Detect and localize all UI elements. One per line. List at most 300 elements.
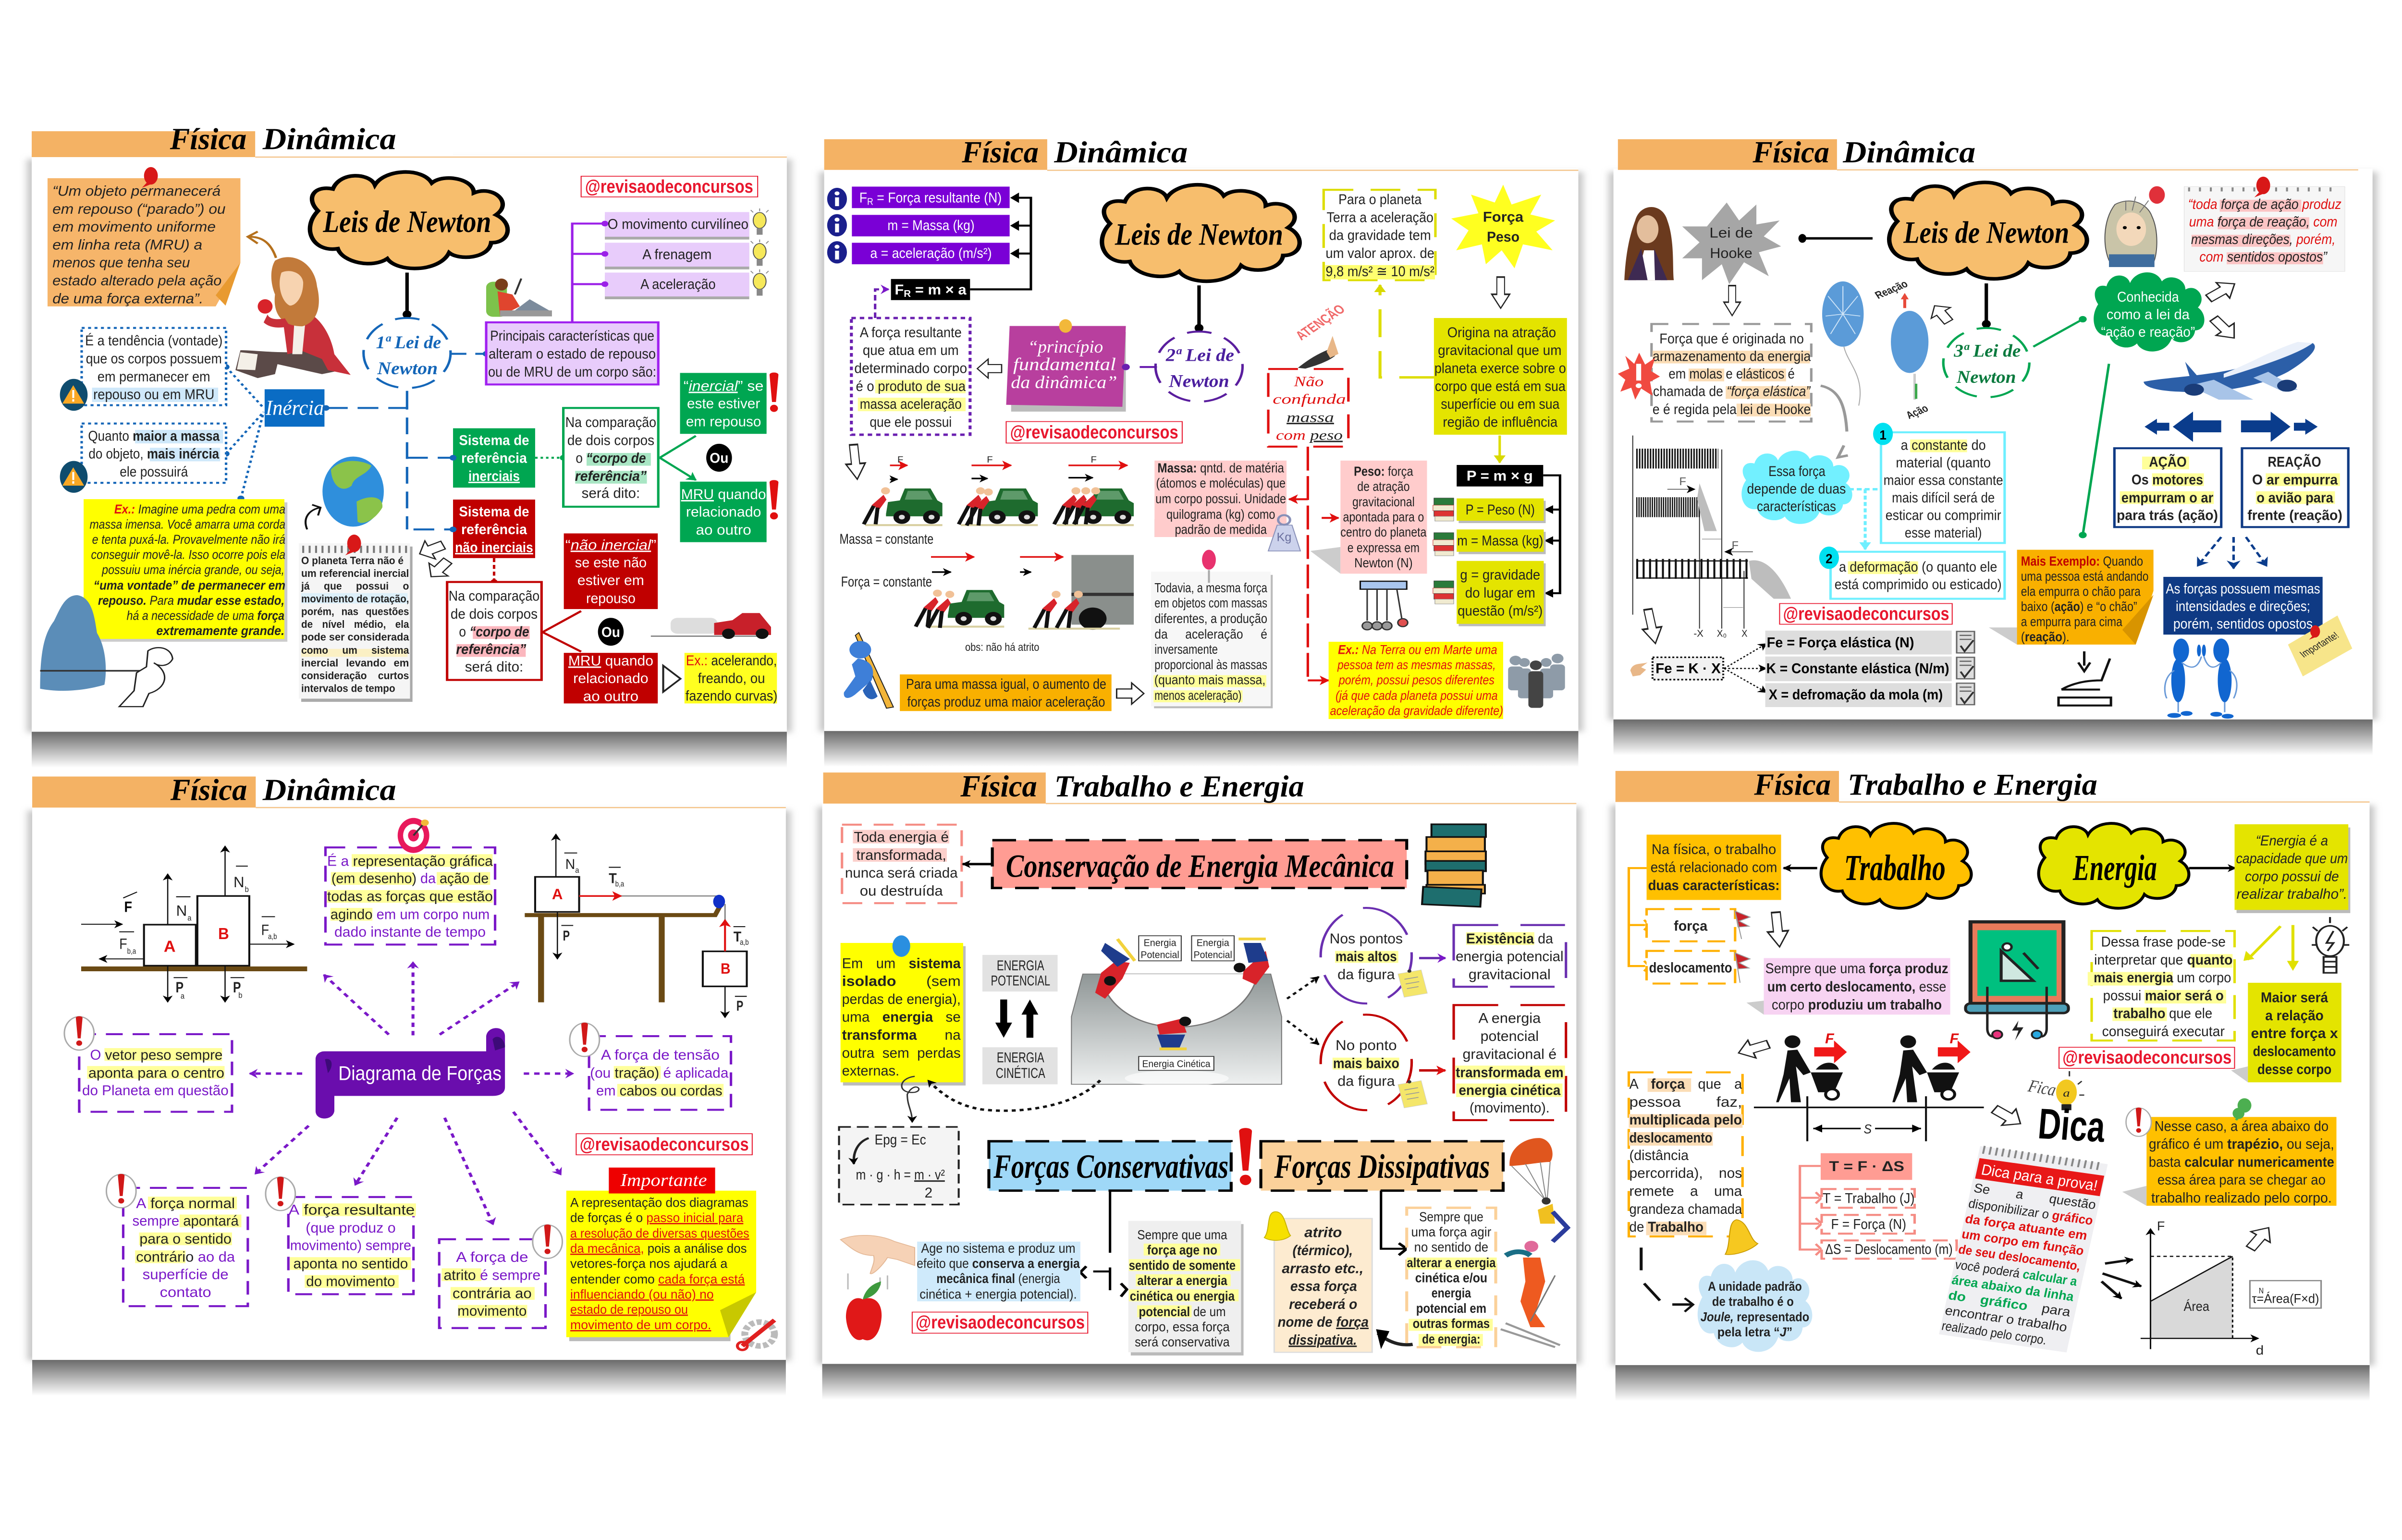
quote note	[48, 167, 240, 306]
formula: P = m x g	[1457, 465, 1543, 487]
box: força: força	[1674, 918, 1707, 934]
circle: 2ª Lei de Newton	[1155, 331, 1242, 402]
text: força elástica: em molas e elásticos é	[1668, 366, 1795, 382]
text: na física: está relacionado com	[1651, 860, 1777, 876]
note: mais exemplo: baixo (ação) e “o chão”	[2021, 599, 2137, 614]
illustration: cars mass constant: F	[897, 455, 903, 464]
label: Importante: Importante	[620, 1170, 707, 1190]
block: inercial em repouso: “inercial” se	[684, 379, 764, 394]
note: planeta Terra: porém, nas questões	[301, 606, 409, 618]
note: todavia: proporcional às massas	[1154, 657, 1267, 672]
text: sempre que dissipativa: alterar a energia	[1407, 1255, 1496, 1270]
banner: Diagrama de Forças	[316, 1028, 505, 1118]
note: importante	[566, 1191, 756, 1341]
text: massa: Quanto maior a massa	[88, 428, 220, 444]
text: não confunda: confunda	[1273, 391, 1346, 407]
icon: lightning bulb	[2312, 917, 2349, 973]
cloud: duas características: características	[1757, 499, 1836, 514]
quote note: menos que tenha seu	[52, 255, 190, 271]
legend: P m g: g = gravidade	[1460, 567, 1540, 583]
handle: @revisaodeconcursos	[580, 1134, 749, 1155]
formula: T = F . ΔS	[1821, 1153, 1912, 1180]
diagram: springs: F	[1732, 539, 1739, 551]
example: Terra e Marte: Ex.: Na Terra ou em Marte uma	[1338, 643, 1497, 657]
text: não confunda	[1268, 369, 1348, 447]
note: sistema isolado: perdas de energia),	[842, 991, 961, 1007]
text: dessa frase: mais energia um corpo	[2094, 970, 2231, 986]
circle: pontos altos	[1321, 908, 1427, 1003]
text: atrito: contrária ao	[453, 1286, 532, 1302]
text: a força: remete a uma	[1630, 1184, 1742, 1199]
box: REAÇÃO: frente (reação)	[2247, 508, 2342, 523]
icon: outline triangle	[663, 666, 681, 692]
text: forças opostas	[2163, 577, 2323, 635]
legend: FR m a	[827, 186, 1010, 264]
handle: @revisaodeconcursos	[2062, 1048, 2231, 1068]
circle: 3ª Lei de Newton	[1943, 328, 2029, 397]
arrows: outline	[2202, 276, 2243, 344]
burst: Lei de Hooke	[1682, 203, 1781, 284]
illustration: airplane	[2144, 342, 2315, 400]
text: peso definição: Newton (N)	[1354, 555, 1413, 570]
block: não inerciais: Sistema de	[459, 504, 529, 520]
formula: FR = m x a	[891, 279, 970, 300]
header: Física Trabalho e Energia: Trabalho e Energia	[1054, 770, 1304, 803]
illustration: balloons: Reação	[1873, 278, 1910, 301]
note: dica para a prova: Dica para a prova!	[1980, 1161, 2099, 1194]
text: toda energia: transformada,	[857, 847, 946, 863]
energy labels: ENERGIA	[997, 1050, 1044, 1066]
text: força normal: para o sentido	[139, 1231, 232, 1247]
text: definição energia: capacidade que um	[2236, 851, 2348, 867]
icon: person reclining	[486, 279, 552, 317]
legend: FR m a: a = aceleração (m/s²)	[870, 245, 992, 261]
box 1: constante: 1	[1879, 427, 1887, 442]
arrows: dashed to forces	[2197, 537, 2267, 569]
note: planeta Terra	[299, 535, 413, 702]
text: força resultante: aponta no sentido	[294, 1256, 408, 1271]
text: comparação verde: de dois corpos	[567, 433, 654, 449]
text: não confunda: Não	[1293, 374, 1324, 390]
text: origina: planeta exerce sobre o	[1434, 361, 1566, 377]
example: acelerando	[685, 653, 777, 704]
note: importante: a resolução de diversas questões	[570, 1226, 749, 1241]
note: mais exemplo: a empurra para cima	[2021, 614, 2122, 629]
text: maior será: desse corpo	[2257, 1062, 2331, 1077]
note: importante: movimento de um corpo.	[570, 1318, 711, 1332]
cloud: unidade padrão: A unidade padrão	[1708, 1280, 1802, 1294]
note: princípio fundamental: “princípio	[1028, 337, 1103, 356]
formula: FR = m x a: R	[904, 288, 911, 299]
handle: @revisaodeconcursos	[1783, 604, 1949, 624]
text: dessa frase: trabalho que ele	[2113, 1006, 2212, 1022]
box 1: constante: mais difícil será de	[1892, 490, 1995, 506]
text: energia transformada: potencial	[1481, 1028, 1539, 1044]
note: planeta Terra: de nível médio, ela	[301, 618, 409, 630]
characteristics list: A frenagem	[642, 247, 711, 262]
note: ação e reação: com sentidos opostos”	[2199, 249, 2328, 265]
note: sempre que conservativa: será conservativa	[1135, 1334, 1230, 1349]
note: todavia	[1151, 550, 1273, 708]
text: massa igual	[900, 674, 1112, 711]
note: importante: entender como cada força está	[570, 1272, 745, 1286]
box: AÇÃO: AÇÃO	[2149, 454, 2187, 470]
illustration: workers pushing wheelbarrows: F	[1825, 1031, 1835, 1047]
banner: Diagrama de Forças: Diagrama de Forças	[338, 1062, 502, 1084]
circle: pontos altos: Nos pontos	[1330, 931, 1403, 947]
formula: Fe = K . X: Fe = K · X	[1655, 661, 1721, 677]
formula: Epg = Ec: m · g · h = m · v²	[856, 1167, 945, 1183]
banner: Forças Conservativas	[989, 1141, 1231, 1191]
header: Física Dinâmica: Dinâmica	[1842, 136, 1975, 169]
text: nesse caso	[2122, 1098, 2337, 1206]
arrows: dashed radial	[250, 962, 573, 1224]
text: nesse caso: essa área para se chegar ao	[2157, 1173, 2326, 1188]
text: a força: multiplicada pelo	[1630, 1112, 1742, 1128]
legend: FR m a: F	[859, 190, 870, 206]
circle: 1ª Lei de Newton: 1ª Lei de	[376, 332, 441, 352]
quote note: estado alterado pela ação	[52, 273, 221, 289]
text: forças opostas: As forças possuem mesmas	[2166, 581, 2320, 597]
chart: área: F	[2157, 1220, 2165, 1234]
cloud: unidade padrão: pela letra “J”	[1717, 1325, 1792, 1339]
burst: Força Peso	[1451, 184, 1555, 268]
text: aceleração gravidade: Terra a aceleração	[1326, 210, 1434, 225]
legend: P m g: P = Peso (N)	[1466, 502, 1535, 518]
note: sistema isolado: outra sem perdas	[842, 1045, 961, 1061]
block: sistemas inerciais: inerciais	[468, 468, 520, 484]
cloud: ação e reação: Conhecida	[2117, 289, 2179, 305]
note: atrito: atrito	[1304, 1225, 1342, 1241]
example: Terra e Marte: pessoa tem as mesmas massas,	[1337, 658, 1496, 672]
note: atrito: receberá o	[1289, 1296, 1357, 1312]
icon: bell	[1264, 1212, 1290, 1240]
text: sempre que: Sempre que uma força produz	[1765, 961, 1948, 977]
logo: Fica a Dica: Fica	[2026, 1076, 2059, 1100]
legend: P m g: m = Massa (kg)	[1457, 533, 1543, 549]
diagram: table and pulley: N	[565, 856, 575, 872]
text: tensão: A força de tensão	[601, 1047, 720, 1063]
text: força resultante	[266, 1177, 416, 1294]
illustration: cars mass constant: F	[987, 455, 993, 464]
diagram: table and pulley: T	[734, 929, 742, 945]
formula: área: N	[2259, 1286, 2264, 1295]
note: sistema isolado: isolado (sem	[842, 974, 961, 990]
diagram: springs	[1633, 436, 1791, 639]
note: ação e reação: mesmas direções, porém,	[2191, 232, 2335, 247]
text: comparação vermelha: referência”	[456, 642, 527, 658]
quote note: “Um objeto permanecerá	[52, 183, 221, 199]
note: dica para a prova: você poderá calcular a	[1954, 1258, 2079, 1289]
note: planeta Terra: intervalos de tempo	[301, 683, 395, 695]
illustration: parachutist	[1509, 1138, 1568, 1242]
text: força normal: contato	[160, 1284, 211, 1300]
arrow: outline left	[977, 359, 1002, 378]
text: energia potencial	[1454, 925, 1566, 987]
label: Massa constante: Massa = constante	[840, 531, 933, 547]
note: sempre que conservativa: alterar a energia	[1137, 1273, 1227, 1288]
text: peso definição: apontada para o	[1343, 510, 1424, 525]
legend: T F ΔS: T = Trabalho (J)	[1823, 1191, 1914, 1206]
diagram: table and pulley	[525, 834, 749, 1017]
box: REAÇÃO: o avião para	[2256, 490, 2333, 506]
block: sistemas inerciais: referência	[461, 451, 527, 466]
handle	[1006, 422, 1182, 443]
handle	[912, 1312, 1088, 1333]
block: sistemas inerciais	[453, 428, 535, 488]
box 2: deformação: 2	[1826, 551, 1833, 566]
block: Inércia	[265, 389, 324, 427]
diagram: blocks on floor: F	[119, 935, 127, 953]
example: pedra: “uma vontade” de permanecer em	[94, 578, 285, 593]
text: sempre que: corpo produziu um trabalho	[1772, 997, 1942, 1013]
note: planeta Terra: movimento de rotação,	[301, 593, 409, 605]
text: vetor peso: do Planeta em questão	[82, 1083, 229, 1099]
illustration: hand and apple	[841, 1235, 915, 1340]
legend: T F ΔS: ΔS = Deslocamento (m)	[1825, 1242, 1953, 1258]
text: origina: região de influência	[1443, 415, 1557, 430]
text: toda energia: ou destruída	[860, 883, 943, 899]
header: Física Trabalho e Energia: Física	[960, 770, 1037, 803]
text: comparação verde: será dito:	[582, 486, 640, 501]
legend: P m g: questão (m/s²)	[1458, 603, 1543, 619]
circle: ponto baixo: da figura	[1337, 1074, 1395, 1089]
note: dica para a prova: disponibilizar o gráfico	[1967, 1197, 2095, 1228]
formula: área: τ=Área(F×d)	[2252, 1292, 2319, 1306]
note: dica para a prova: de seu deslocamento,	[1957, 1242, 2082, 1273]
illustration: workers pushing wheelbarrows	[1754, 1031, 1984, 1141]
text: definição energia: corpo possui de	[2245, 869, 2339, 885]
text: não confunda: com peso	[1276, 428, 1343, 443]
text: força elástica	[1652, 324, 1811, 422]
text: sempre que dissipativa: no sentido de	[1414, 1240, 1488, 1255]
text: origina: corpo que está em sua	[1435, 379, 1566, 394]
text: representação gráfica: todas as forças que estão	[327, 889, 493, 904]
box 1: constante: esse material)	[1905, 525, 1982, 541]
note: dica para a prova: um corpo em função	[1961, 1227, 2085, 1258]
text: força normal: A força normal	[136, 1196, 235, 1211]
panel: 2ª Lei de Newton	[819, 136, 1583, 767]
text: vetor peso	[64, 1016, 232, 1112]
text: massa	[60, 424, 226, 493]
labels: energy on pipe	[1139, 936, 1234, 1070]
banner: Forças Dissipativas	[1261, 1141, 1503, 1191]
note: princípio fundamental: da dinâmica”	[1011, 372, 1117, 392]
text: vetor peso: O vetor peso sempre	[90, 1047, 222, 1063]
logo: Fica a Dica	[2026, 1071, 2108, 1151]
text: dessa frase: Dessa frase pode-se	[2101, 934, 2226, 950]
illustration: Newton	[235, 257, 351, 378]
note: mais exemplo: uma pessoa está andando	[2021, 569, 2148, 584]
cloud: ação e reação: como a lei da	[2107, 307, 2190, 323]
note: dica para a prova: da força atuante em	[1964, 1212, 2089, 1243]
note: ação e reação	[2184, 177, 2345, 271]
icon: blue figures	[2165, 638, 2237, 719]
arrow: outline down	[1765, 912, 1790, 948]
note: sempre que conservativa	[1128, 1221, 1244, 1356]
text: age no sistema	[917, 1241, 1080, 1302]
badge: Ou	[706, 444, 732, 472]
banner: Forças Conservativas: Forças Conservativas	[993, 1148, 1228, 1186]
diagram: table and pulley: P	[736, 998, 743, 1014]
illustration: red car	[651, 613, 771, 639]
example: acelerando: Ex.: acelerando,	[686, 653, 777, 669]
icon: Newton's cradle	[1360, 581, 1408, 630]
arrow: outline right	[1116, 683, 1144, 704]
text: energia transformada: transformada em	[1456, 1065, 1564, 1081]
portrait: cartoon Newton	[2105, 186, 2165, 267]
text: comparação vermelha: Na comparação	[449, 588, 539, 604]
panel: 1ª Lei de Newton	[27, 122, 792, 768]
text: tendência: É a tendência (vontade)	[85, 333, 222, 349]
icon: exclamations	[770, 373, 778, 519]
text: força resultante: (que produz o	[306, 1220, 396, 1236]
text: força resultante: que atua em um	[863, 342, 959, 358]
text: força resultante: que ele possui	[870, 415, 952, 430]
arrow: outline down	[844, 444, 867, 480]
box: REAÇÃO: REAÇÃO	[2267, 454, 2321, 470]
text: tendência: em permanecer em	[98, 369, 210, 385]
block: MRU vermelho	[564, 653, 658, 705]
cloud: Leis de Newton	[1102, 185, 1299, 281]
text: força elástica: armazenamento da energia	[1653, 349, 1811, 365]
note: importante: A representação dos diagramas	[570, 1196, 748, 1210]
block: não inerciais: referência	[461, 522, 527, 538]
diagram: blocks on floor: N	[176, 902, 187, 919]
text: sempre que: um certo deslocamento, esse	[1767, 979, 1946, 995]
text: sempre que dissipativa: Sempre que	[1419, 1210, 1483, 1224]
header: Física Dinâmica	[32, 122, 787, 157]
energy labels: ENERGIA	[997, 958, 1044, 974]
text: representação gráfica: É a representação gráfica	[327, 854, 493, 869]
diagram: blocks on floor: P	[233, 979, 241, 996]
block: não inercial: “não inercial”	[565, 538, 656, 553]
scribble arrow	[902, 1076, 919, 1122]
portrait: Hooke	[1624, 207, 1674, 280]
illustration: cars mass constant	[864, 455, 1134, 526]
example: Terra e Marte	[1329, 642, 1503, 719]
text: sempre que dissipativa: outras formas	[1413, 1316, 1490, 1331]
text: dessa frase: interpretar que quanto	[2094, 952, 2232, 968]
characteristics box: alteram o estado de repouso	[489, 346, 656, 362]
circle: 2ª Lei de Newton: 2ª Lei de	[1165, 345, 1234, 365]
text: na física: duas características:	[1648, 878, 1779, 893]
note: atrito: essa força	[1290, 1279, 1357, 1295]
block: inercial em repouso: este estiver	[687, 396, 760, 412]
example: pedra: repouso. Para mudar esse estado,	[98, 594, 284, 608]
handle	[1779, 603, 1952, 624]
note: todavia: em objetos com massas	[1154, 596, 1267, 611]
text: energia potencial: energia potencial	[1456, 949, 1564, 965]
diagram: table and pulley: T	[609, 871, 617, 887]
diagram: blocks on floor: F	[261, 921, 269, 939]
note: sistema isolado: externas.	[842, 1063, 899, 1079]
formula: Epg = Ec	[839, 1127, 959, 1205]
characteristics list: A aceleração	[640, 277, 716, 293]
note: sempre que conservativa: Sempre que uma	[1137, 1227, 1227, 1242]
chart: área: d	[2256, 1344, 2264, 1357]
text: origina: gravitacional que um	[1438, 342, 1561, 358]
cloud: Energia: Energia	[2072, 847, 2157, 888]
circle: 3ª Lei de Newton: 3ª Lei de	[1953, 341, 2021, 360]
box: REAÇÃO: O ar empurra	[2252, 472, 2338, 488]
text: tensão: em cabos ou cordas	[596, 1083, 723, 1099]
diagram: table and pulley: b,a	[615, 879, 625, 888]
text: origina: Origina na atração	[1447, 325, 1556, 341]
circle: 1ª Lei de Newton	[364, 318, 451, 388]
cloud: unidade padrão	[1698, 1260, 1812, 1352]
cloud: Energia	[2039, 823, 2189, 908]
legend: Fe K X: K = Constante elástica (N/m)	[1766, 661, 1949, 677]
block: não inerciais: não inerciais	[455, 540, 533, 556]
icon: red burst exclamation	[1618, 353, 1660, 400]
box 1: constante: material (quanto	[1896, 455, 1991, 471]
text: maior será: Maior será	[2261, 990, 2328, 1006]
handle: @revisaodeconcursos	[1010, 422, 1178, 442]
diagram: springs: X₀	[1717, 628, 1727, 639]
text: força resultante	[851, 318, 970, 435]
box: AÇÃO	[2114, 448, 2221, 527]
characteristics list	[601, 208, 769, 299]
example: Terra e Marte: aceleração da gravidade diferente)	[1330, 704, 1503, 718]
formula: Fe = K . X	[1630, 657, 1723, 680]
formula: T = F . ΔS: T = F · ΔS	[1829, 1159, 1904, 1174]
note: todavia: diferentes, a produção	[1154, 611, 1267, 626]
note: planeta Terra: um referencial inercial	[301, 567, 409, 579]
diagram: springs: X	[1741, 628, 1748, 639]
handle	[2059, 1047, 2234, 1068]
cloud: ação e reação	[2094, 272, 2205, 352]
banner: Forças Dissipativas: Forças Dissipativas	[1274, 1148, 1490, 1186]
text: força resultante: determinado corpo	[854, 361, 967, 377]
text: peso definição: centro do planeta	[1340, 525, 1427, 539]
diagram: table and pulley: P	[563, 928, 570, 944]
icon: Kg weight: Kg	[1277, 530, 1291, 544]
box 2: deformação	[1819, 547, 2005, 599]
note: sempre que conservativa: cinética ou energia	[1130, 1289, 1235, 1304]
burst: Força Peso: Força	[1483, 209, 1523, 225]
burst: Força Peso: Peso	[1487, 229, 1520, 245]
box 2: deformação: a deformação (o quanto ele	[1839, 559, 1997, 575]
block: inercial em repouso: em repouso	[686, 414, 761, 430]
text: nesse caso: Nesse caso, a área abaixo do	[2155, 1119, 2328, 1134]
text: na física	[1647, 835, 1781, 900]
legend: FR m a: = Força resultante (N)	[873, 190, 1002, 206]
text: massa: ele possuirá	[120, 464, 188, 480]
text: massa definição: (átomos e moléculas) que	[1156, 476, 1286, 490]
illustration: globe	[306, 456, 384, 529]
text: sempre que dissipativa	[1407, 1208, 1497, 1347]
labels: energy on pipe: Potencial	[1194, 949, 1232, 960]
text: a força: pessoa faz,	[1630, 1094, 1742, 1110]
text: aceleração gravidade: 9,8 m/s² ≅ 10 m/s²	[1325, 264, 1434, 280]
text: sempre que dissipativa: cinética e/ou	[1415, 1271, 1487, 1285]
example: pedra: massa imensa. Você amarra uma corda	[89, 517, 285, 532]
characteristics box	[486, 322, 658, 384]
text: força normal	[106, 1174, 248, 1306]
diagram: blocks on floor: A	[164, 937, 176, 955]
example: Terra e Marte: (já que cada planeta possui uma	[1336, 689, 1498, 703]
chart: área: Área	[2183, 1298, 2209, 1314]
block: MRU verde: ao outro	[696, 522, 751, 538]
text: peso definição: e expressa em	[1348, 540, 1420, 555]
text: peso definição: gravitacional	[1352, 494, 1415, 509]
note: ação e reação: uma força de reação, com	[2189, 214, 2338, 230]
text: massa definição: um corpo possui. Unidade	[1155, 491, 1286, 506]
illustration: cars mass constant: F	[1091, 455, 1097, 464]
note: todavia: (quanto mais massa,	[1154, 672, 1265, 687]
cloud: duas características: Essa força	[1768, 464, 1826, 479]
